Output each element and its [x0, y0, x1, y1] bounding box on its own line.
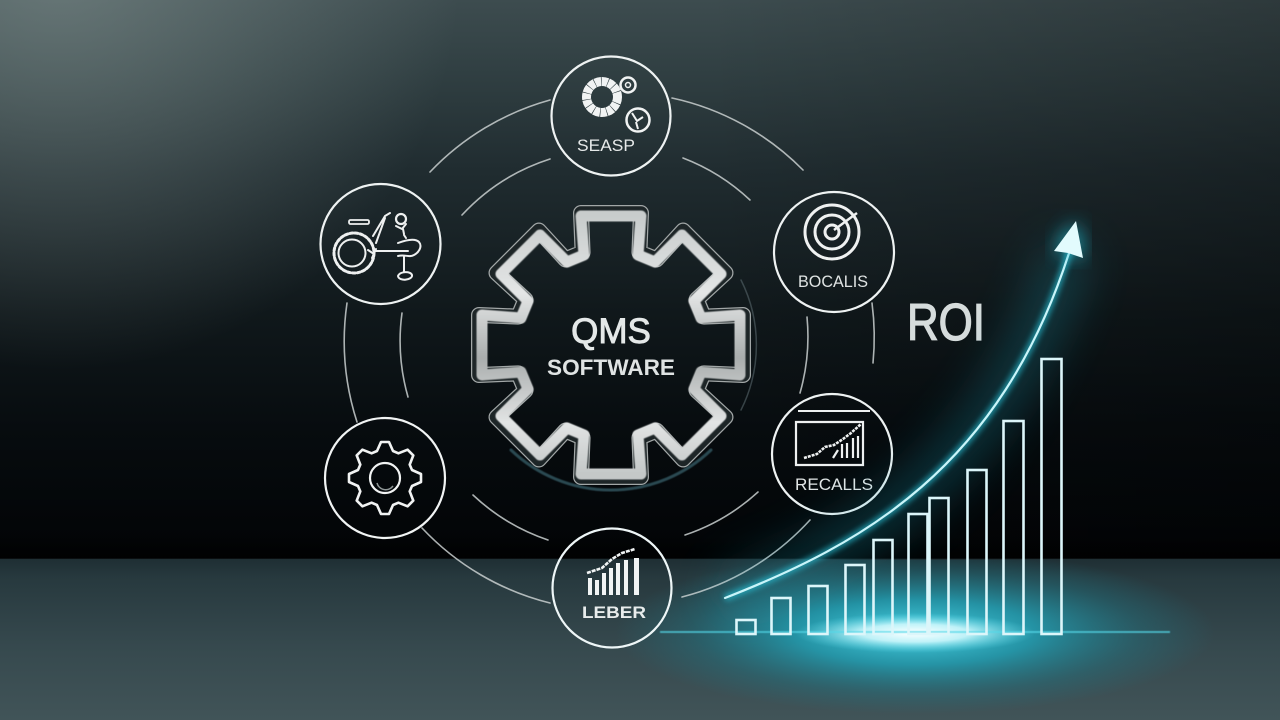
icon: gear — [349, 442, 421, 514]
label: LEBER — [582, 603, 646, 622]
ROI label: ROI — [907, 294, 985, 352]
bar chart — [736, 359, 1062, 634]
icon: rising bars — [587, 549, 639, 595]
floor glow — [642, 560, 1188, 706]
node: top gears — [552, 56, 670, 176]
arrowhead — [1054, 221, 1083, 258]
icon: cluster of gears — [586, 78, 650, 132]
icon: wheel and linkage — [334, 213, 420, 280]
node: upper right target — [774, 192, 894, 312]
label: BOCALIS — [798, 272, 868, 291]
icon: target with dart — [805, 205, 859, 259]
node: lower left gear — [325, 418, 445, 538]
label: RECALLS — [795, 475, 873, 494]
background wall — [0, 0, 1280, 570]
node: bottom bars — [552, 528, 672, 648]
gear outline — [479, 213, 743, 477]
ROI growth curve with arrow — [725, 221, 1083, 598]
label: SEASP — [577, 137, 635, 155]
icon: chart board — [796, 411, 870, 465]
node: lower right chart — [772, 394, 892, 514]
gear subtitle: SOFTWARE: SOFTWARE — [547, 355, 675, 380]
gear backing rim — [511, 280, 756, 490]
floor — [0, 535, 1280, 720]
central gear — [479, 213, 756, 490]
gear title: QMS: QMS — [571, 312, 651, 351]
node: upper left process icon — [320, 184, 440, 304]
orbit arcs — [344, 98, 874, 603]
